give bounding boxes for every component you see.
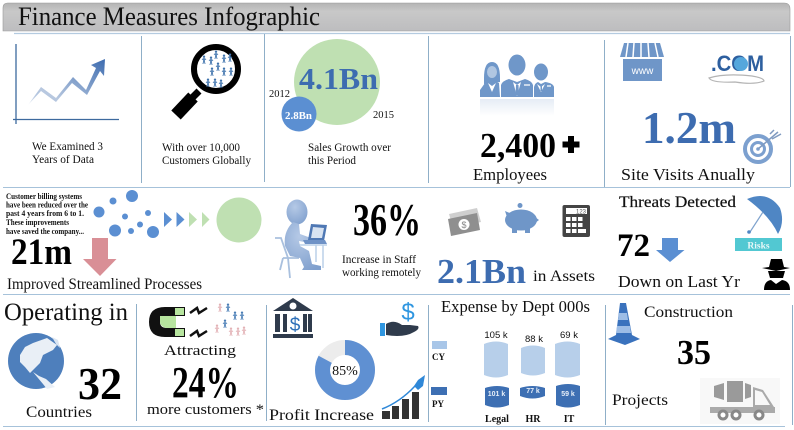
- donut chart: 85%: [332, 364, 358, 379]
- cylinder chart: 88 k: [525, 334, 543, 345]
- label: Profit Increase: [269, 407, 374, 424]
- legend: PY: [432, 399, 444, 409]
- icon: banknotes: [448, 208, 481, 236]
- panel: years of data: [13, 44, 119, 166]
- heading: Expense by Dept 000s: [441, 297, 590, 316]
- icon: people: [215, 304, 246, 336]
- title: Finance Measures Infographic: [18, 2, 320, 31]
- icon: attraction bolts: [190, 308, 207, 336]
- risks tag: Risks: [747, 242, 770, 252]
- icon: calculator: 123: [576, 210, 587, 216]
- panel: expense by department: [431, 297, 590, 425]
- bubble chart: 4.1Bn: [299, 61, 378, 96]
- panel: streamlined processes: [6, 190, 262, 293]
- label: Projects: [612, 392, 668, 409]
- stat: 35: [677, 333, 711, 372]
- risks tag: [735, 238, 782, 252]
- icon: umbrella: [747, 196, 782, 234]
- icon: calculator: [562, 205, 590, 237]
- label: Attracting: [164, 343, 237, 359]
- panel: remote staff: [275, 194, 421, 279]
- panel: sales growth: [269, 39, 394, 167]
- stat: 2,400: [480, 126, 556, 165]
- title bar: [3, 2, 790, 31]
- stat: 21m: [11, 232, 72, 273]
- icon: hand with dollar: $: [401, 299, 415, 326]
- icon: web store: [620, 43, 664, 81]
- panel: site visits: [620, 43, 781, 184]
- heading: Construction: [644, 304, 733, 321]
- icon: bank: $: [290, 315, 301, 336]
- icon: hand with dollar: [380, 299, 418, 336]
- text block: These improvements: [6, 218, 69, 227]
- heading: Threats Detected: [619, 194, 736, 211]
- cylinder chart: 69 k: [560, 330, 578, 341]
- panel: customers: [162, 47, 251, 167]
- icon: plus: [562, 136, 580, 153]
- caption: working remotely: [342, 265, 421, 279]
- label: in Assets: [533, 268, 595, 285]
- panel: attracting customers: [147, 304, 264, 418]
- legend: [431, 341, 447, 409]
- icon: web store: www: [631, 66, 654, 77]
- legend: CY: [432, 352, 445, 362]
- stat: 72: [617, 228, 650, 264]
- cylinder chart: 101 k: [488, 391, 505, 398]
- cylinder chart: HR: [526, 414, 541, 425]
- stat: 32: [78, 358, 122, 409]
- icon: bank: [273, 298, 313, 338]
- caption: Sales Growth over: [308, 142, 391, 154]
- stat: 1.2m: [642, 102, 736, 153]
- arrow: down: [83, 238, 116, 276]
- stat: 24%: [172, 358, 239, 407]
- panel: threats: [617, 194, 790, 291]
- label: more customers *: [147, 402, 264, 418]
- panel: countries: [4, 299, 128, 421]
- panel: employees: [473, 54, 580, 184]
- bubble chart: 2015: [373, 110, 394, 121]
- caption: this Period: [308, 155, 356, 167]
- icon: person at laptop: [275, 200, 327, 278]
- caption: Increase in Staff: [342, 252, 416, 266]
- text block: have been reduced over the: [6, 200, 88, 210]
- heading: Operating in: [4, 299, 128, 326]
- line chart icon: [13, 44, 119, 124]
- icon: banknotes: $: [461, 220, 467, 230]
- cylinder chart: 59 k: [561, 391, 575, 398]
- icon: dot com: .COM: [711, 51, 764, 76]
- text block: past 4 years from 6 to 1.: [6, 209, 84, 218]
- donut chart: [322, 348, 368, 392]
- icon: globe: [8, 333, 64, 389]
- caption: Years of Data: [32, 154, 94, 166]
- bubble chart: [269, 39, 394, 132]
- icon: target: [745, 130, 781, 162]
- panel: profit: [269, 298, 425, 424]
- bubble chart: 2.8Bn: [285, 111, 312, 122]
- cylinder chart: [484, 330, 580, 425]
- icon: cement truck: [700, 378, 780, 424]
- icon: spy: [762, 259, 790, 290]
- stat: 36%: [353, 194, 421, 245]
- icon: piggy bank: [505, 203, 539, 233]
- cylinder chart: 77 k: [526, 388, 540, 395]
- caption: Customers Globally: [162, 155, 251, 167]
- label: Countries: [26, 404, 92, 421]
- text block: have saved the company...: [6, 227, 84, 236]
- label: Site Visits Anually: [621, 165, 756, 184]
- stat: 2.1Bn: [437, 252, 526, 291]
- caption: We Examined 3: [32, 141, 103, 153]
- panel: assets: [437, 203, 595, 291]
- label: Down on Last Yr: [618, 272, 740, 291]
- cylinder chart: Legal: [485, 414, 509, 425]
- process flow diagram: [94, 190, 262, 242]
- label: Employees: [473, 165, 547, 184]
- cylinder chart: 105 k: [484, 330, 508, 341]
- icon: magnifier over people: [176, 47, 238, 115]
- cylinder chart: IT: [564, 414, 575, 425]
- panel: construction: [608, 303, 780, 424]
- icon: traffic cone: [608, 303, 640, 345]
- icon: magnet: [149, 307, 185, 337]
- text block: Customer billing systems: [6, 192, 82, 201]
- caption: With over 10,000: [162, 142, 240, 154]
- label: Improved Streamlined Processes: [7, 276, 202, 293]
- arrow: down: [656, 238, 684, 262]
- icon: growth bars with rocket: [382, 375, 425, 419]
- bubble chart: 2012: [269, 89, 290, 100]
- icon: staff group: [480, 54, 554, 116]
